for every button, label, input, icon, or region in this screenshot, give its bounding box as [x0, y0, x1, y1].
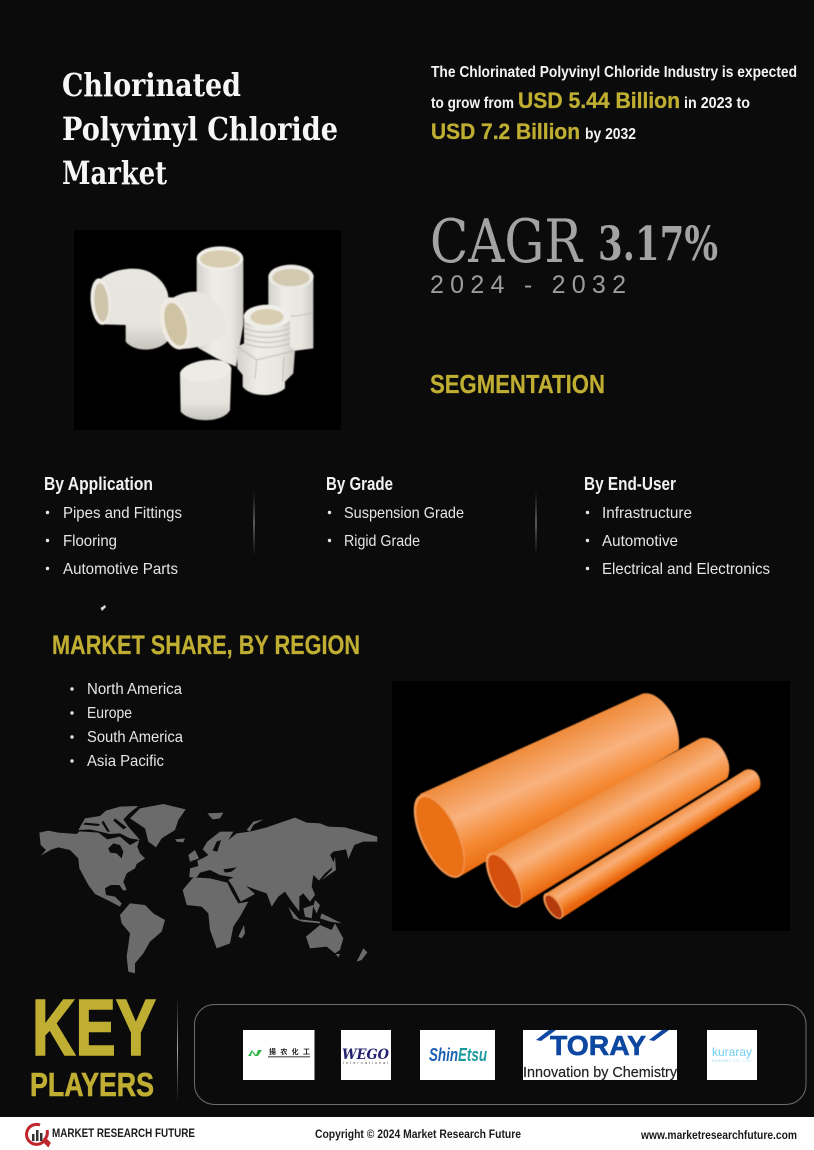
- logo: WEGO: [341, 1030, 391, 1080]
- segment: by application: Pipes and Fittings: [63, 505, 182, 522]
- key players heading: [30, 983, 156, 1103]
- region list: South America: [87, 729, 183, 746]
- divider: [536, 490, 537, 556]
- logo: Kuraray: KURARAY CO., LTD.: [712, 1059, 752, 1063]
- title: [62, 66, 338, 192]
- market share heading: MARKET SHARE, BY REGION: [52, 630, 360, 660]
- CAGR callout: CAGR: [430, 207, 584, 277]
- segment: by end-user: Automotive: [602, 533, 678, 550]
- title: Market: [62, 154, 167, 192]
- footer band: MARKET RESEARCH FUTURE: [52, 1126, 195, 1140]
- segment: by application: Automotive Parts: [63, 561, 178, 578]
- segment: by end-user: Electrical and Electronics: [602, 561, 770, 578]
- logo: WEGO: International: [343, 1060, 388, 1065]
- world map: [39, 804, 377, 973]
- logo: Shin-Etsu: Shin: [429, 1045, 458, 1065]
- segment: by application: By Application: [44, 474, 153, 494]
- photo: white CPVC fittings: [74, 230, 341, 430]
- logo: Chinese chemical company: [243, 1030, 314, 1080]
- title: Polyvinyl Chloride: [62, 110, 338, 148]
- CAGR callout: 3.17%: [598, 217, 718, 272]
- divider: [177, 996, 178, 1103]
- market size summary: USD 7.2 Billion: [431, 119, 580, 144]
- title: Chlorinated: [62, 66, 241, 104]
- segment: by end-user: Infrastructure: [602, 505, 692, 522]
- segment: by grade: Suspension Grade: [344, 505, 464, 522]
- footer logo: [27, 1124, 49, 1145]
- segment: by grade: [326, 474, 464, 550]
- footer band: Copyright © 2024 Market Research Future: [315, 1127, 521, 1141]
- region list: [70, 681, 183, 770]
- region list: Europe: [87, 705, 132, 722]
- region list: Asia Pacific: [87, 753, 164, 770]
- market size summary: by 2032: [585, 126, 636, 143]
- logo: Toray: [523, 1030, 677, 1081]
- logo: Toray: Innovation by Chemistry: [523, 1064, 677, 1081]
- logo: Chinese chemical company: 揚农化工: [269, 1047, 310, 1056]
- key players heading: KEY: [32, 983, 156, 1072]
- market size summary: to grow from: [431, 95, 514, 112]
- logo: Kuraray: [707, 1030, 757, 1080]
- logo: Shin-Etsu: Etsu: [458, 1045, 487, 1065]
- footer band: [0, 1117, 814, 1150]
- logo: WEGO: WEGO: [342, 1047, 390, 1063]
- segmentation heading: SEGMENTATION: [430, 369, 605, 399]
- market size summary: USD 5.44 Billion: [518, 88, 680, 113]
- key players panel: [194, 1004, 806, 1104]
- logo: Shin-Etsu: [420, 1030, 495, 1080]
- segment: by application: [44, 474, 182, 578]
- segment: by end-user: By End-User: [584, 474, 676, 494]
- photo: orange CPVC pipes: [392, 681, 790, 931]
- segment: by end-user: [584, 474, 770, 578]
- key players heading: PLAYERS: [30, 1066, 154, 1103]
- market size summary: [431, 64, 797, 144]
- CAGR callout: 2024 - 2032: [430, 271, 626, 299]
- small mark: [100, 605, 106, 611]
- divider: [254, 490, 255, 556]
- CAGR callout: [430, 207, 718, 299]
- logo: Kuraray: kuraray: [712, 1045, 752, 1059]
- region list: North America: [87, 681, 182, 698]
- segment: by grade: Rigid Grade: [344, 533, 420, 550]
- market size summary: in 2023 to: [684, 95, 750, 112]
- logo: Toray: TORAY: [550, 1030, 646, 1061]
- segment: by application: Flooring: [63, 533, 117, 550]
- segment: by grade: By Grade: [326, 474, 393, 494]
